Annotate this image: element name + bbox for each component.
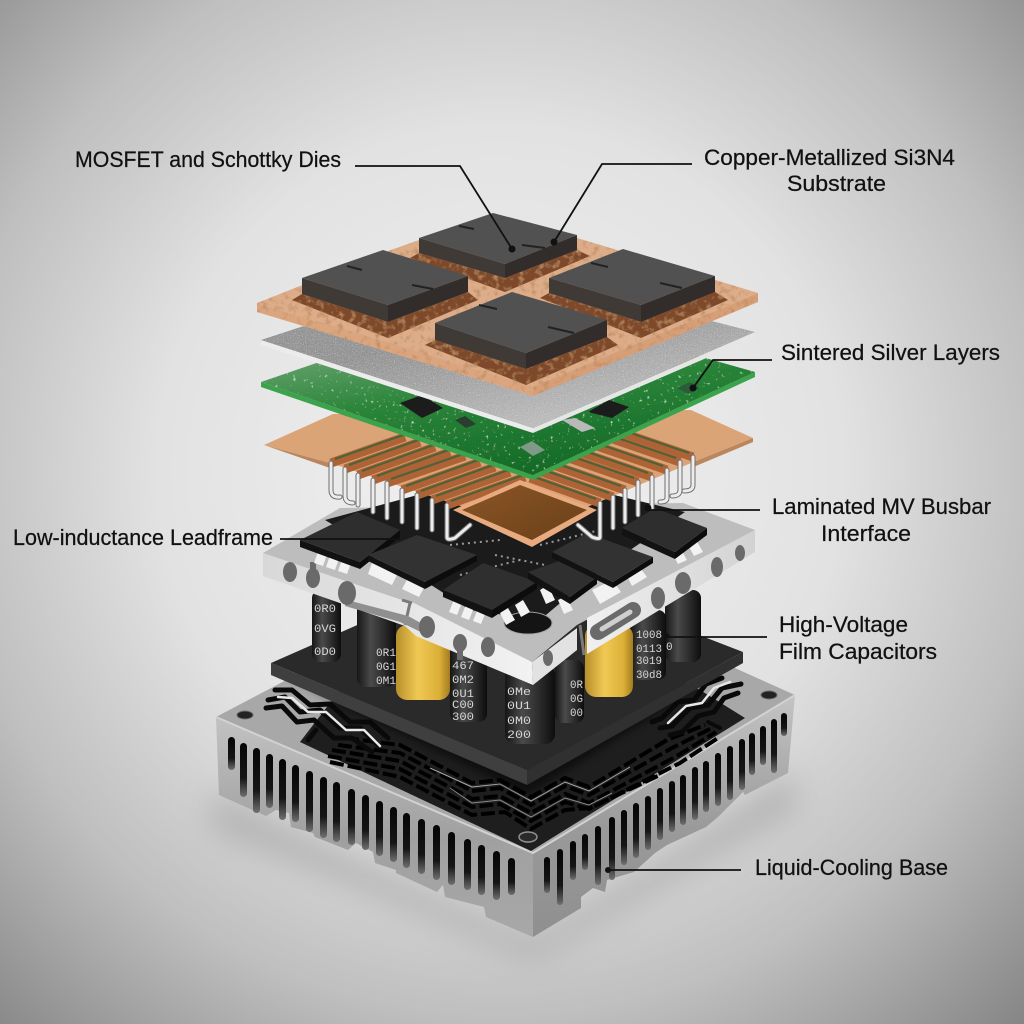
heatsink left face [216,717,533,937]
hole in top frame [504,612,552,634]
capacitor mid front: 0U1 [452,689,474,701]
PCB edges [261,372,755,480]
left zigzag channels on rim [266,690,388,752]
slot highlight [602,612,630,629]
block top frame [263,503,755,662]
heatsink top rim [216,565,795,853]
capacitor center rear: 00 [570,708,583,720]
leader: leadframe [280,538,400,540]
slots on left face [228,737,515,900]
right strip highlights [526,428,689,499]
capacitor left [357,600,396,688]
leader: capacitors [667,636,767,638]
PCB chips [400,382,700,456]
laminated busbar leadframe strips [331,428,693,505]
groove channels on top [345,600,430,634]
label: High-Voltage Film Capacitors [779,612,937,664]
black capacitor mounting plate [271,560,743,795]
plate shadow [290,675,720,795]
power stage block with chips [263,470,755,685]
serpentine channels [328,725,718,829]
black top with channels [300,600,745,851]
sintered silver layer [261,265,755,433]
copper-metallized Si3N4 substrate [257,228,758,396]
MOSFET and Schottky dies [302,213,715,369]
chip left center [368,535,477,589]
label: High-Voltage Film Capacitors: High-Voltage [779,612,908,637]
capacitor mid front: C00 [452,700,474,712]
yellow capacitor left [396,625,450,700]
capacitor back left: 0R0 [314,604,336,616]
label: Copper-Metallized Si3N4 Substrate: Substrate [787,171,886,196]
left copper strips [331,437,525,505]
capacitor center rear [555,660,584,723]
leader: substrate [554,164,692,242]
chip far left [300,512,400,569]
label: Laminated MV Busbar Interface [772,494,991,546]
holes on left face [283,562,553,666]
capacitor left: 0R1 [376,648,396,660]
copper plate layer [264,410,753,530]
die attach shadows [292,250,728,385]
capacitor front: 0M0 [507,716,531,728]
capacitor right back: 0 [666,642,673,654]
label: Liquid-Cooling Base: Liquid-Cooling Base [755,855,948,880]
label: Low-inductance Leadframe: Low-inductance Leadframe [13,525,273,550]
capacitor mid front: 467 [452,661,474,673]
leader: cooling base [608,869,741,871]
heatsink floor shadow [210,770,795,958]
label: Laminated MV Busbar Interface: Interface [821,521,911,546]
PCB top [261,300,755,475]
bright front edges [216,695,795,853]
label: High-Voltage Film Capacitors: Film Capacitors [779,639,937,664]
mounting holes [237,691,777,842]
back die [419,213,577,278]
leadframe wire loops [331,457,693,539]
groove gaps [402,600,584,655]
capacitor left: 0M1 [376,676,396,688]
capacitor left: 0G1 [376,662,396,674]
capacitor front: 0Me [507,687,531,699]
capacitor rear right [630,610,666,682]
capacitor front [505,665,555,744]
chip far right [622,508,707,559]
capacitor back left [312,590,341,662]
capacitor back left: 0D0 [314,647,336,659]
leader: silver layers [693,360,772,388]
capacitor rear right: 3019 [636,656,662,668]
recessed dark board [325,470,685,620]
right wing face [587,530,755,654]
capacitor front: 200 [507,730,531,742]
capacitor rear right: 1008 [636,630,662,642]
label: MOSFET and Schottky Dies: MOSFET and Schottky Dies [75,147,341,172]
slots on right face [544,713,787,905]
capacitor center rear: 0G [570,694,583,706]
label: Copper-Metallized Si3N4 Substrate [704,145,955,196]
left die [302,250,468,322]
right die [549,249,715,322]
right copper strips [530,432,693,503]
label: Sintered Silver Layers: Sintered Silver Layers [781,340,1000,365]
capacitor front: 0U1 [507,701,531,713]
yellow capacitor right [585,625,633,697]
plate left edge [271,663,527,785]
chip right center [528,560,597,604]
label: Copper-Metallized Si3N4 Substrate: Copper-Metallized Si3N4 [704,145,955,170]
capacitor rear right: 30d8 [636,670,662,682]
package pins [314,540,703,625]
chip center [443,563,537,618]
capacitor right back [665,590,701,662]
substrate left edge [257,303,533,396]
left strip highlights [335,433,529,501]
capacitor rear right: 0113 [636,644,662,656]
capacitor center rear: 0R [570,680,583,692]
holes on right face [598,545,745,632]
board specks [450,530,600,590]
plate right edge [527,652,743,785]
leader lines [280,164,772,870]
front die [435,292,607,369]
right block face [532,628,577,685]
leader dots [508,238,696,873]
capacitor mid front: 300 [452,712,474,724]
capacitor back left: 0VG [314,624,336,636]
green PCB layer [261,300,755,480]
heatsink right face [533,695,795,937]
left block face [263,553,533,685]
leader: MOSFET dies [355,166,512,249]
busbar interface copper pad [453,480,597,547]
leader: busbar interface [648,509,760,511]
high-voltage film capacitors [312,590,701,744]
capacitor mid front: 0M2 [452,675,474,687]
right zigzag channels on rim [652,678,741,735]
chip right [552,533,653,588]
substrate right edge [533,293,758,396]
plate top [271,560,743,770]
label: Laminated MV Busbar Interface: Laminated MV Busbar [772,494,991,519]
capacitor mid front [450,640,487,724]
substrate top [257,228,758,387]
liquid-cooling base [216,565,795,937]
